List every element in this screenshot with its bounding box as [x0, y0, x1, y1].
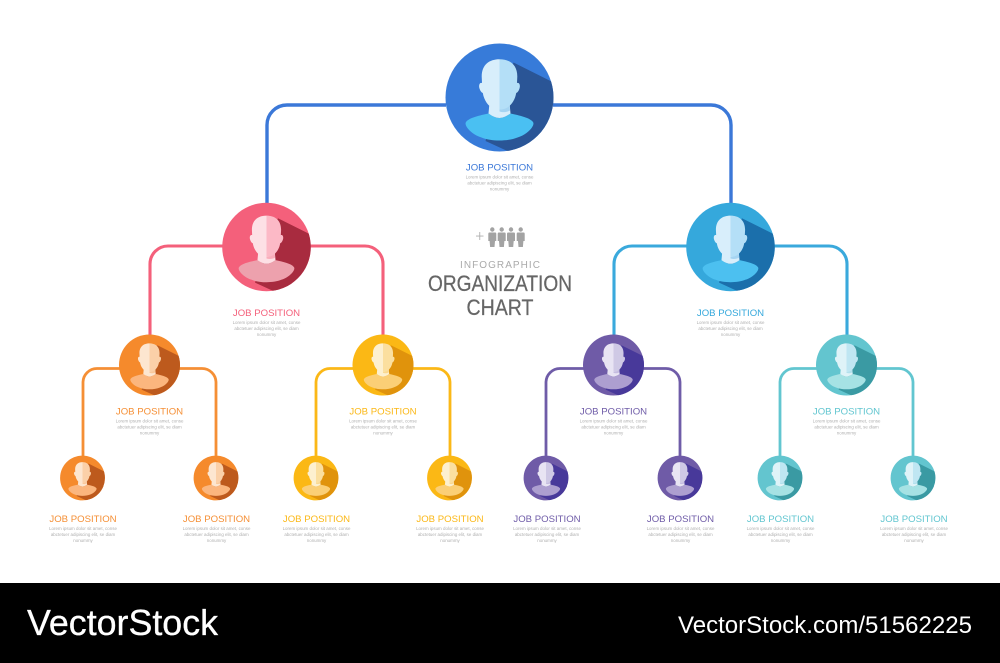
label: yellow leaf 1: JOB POSITION [283, 514, 350, 525]
label: pink: nonummy [257, 332, 277, 337]
footer bar: VectorStock.com/51562225 [678, 612, 972, 639]
label: purple: JOB POSITION [580, 406, 647, 418]
avatar: orange leaf 2 [194, 456, 242, 507]
label: yellow leaf 2: nonummy [440, 538, 461, 543]
label: orange leaf 2: nonummy [207, 538, 227, 543]
connector lines: orange branch [83, 368, 216, 457]
label: yellow leaf 1 [283, 514, 351, 543]
label: orange leaf 1: Lorem ipsum dolor sit amet, conse [49, 526, 117, 531]
avatar: orange leaf 1 [60, 456, 108, 507]
label: purple leaf 1 [513, 514, 581, 543]
label: teal leaf 2: Lorem ipsum dolor sit amet, conse [880, 526, 948, 531]
title: ORGANIZATION [428, 271, 572, 296]
label: orange leaf 2: abctetuer adipiscing elit, se diam [184, 532, 249, 537]
label: purple leaf 2: JOB POSITION [647, 514, 714, 525]
avatar: purple leaf 2 [658, 456, 706, 507]
label: teal leaf 2 [880, 514, 948, 543]
label: yellow leaf 2: JOB POSITION [416, 514, 484, 525]
label: orange: nonummy [140, 430, 160, 436]
label: teal leaf 2: JOB POSITION [880, 514, 948, 525]
label: yellow leaf 2 [416, 514, 484, 543]
label: orange leaf 1: JOB POSITION [49, 514, 117, 525]
avatar: teal leaf 2 [891, 456, 939, 507]
label: teal leaf 1: abctetuer adipiscing elit, se diam [748, 532, 813, 537]
footer bar: VectorStock [27, 602, 219, 643]
label: yellow leaf 1: Lorem ipsum dolor sit amet, conse [283, 526, 351, 531]
label: purple leaf 2: Lorem ipsum dolor sit amet, conse [647, 526, 715, 531]
label: orange [116, 406, 184, 436]
label: purple: nonummy [604, 430, 624, 436]
label: blue: JOB POSITION [697, 308, 764, 319]
label: teal: nonummy [837, 430, 857, 436]
label: purple leaf 2 [647, 514, 715, 543]
title [428, 271, 572, 320]
label: pink: Lorem ipsum dolor sit amet, conse [233, 320, 301, 325]
label: top position: JOB POSITION [466, 162, 533, 174]
connector lines: blue branch [614, 246, 847, 336]
label: purple leaf 1: JOB POSITION [513, 514, 581, 525]
connector lines: yellow branch [316, 368, 450, 457]
label: teal [813, 406, 881, 436]
avatar: purple leaf 1 [524, 456, 572, 507]
label: purple leaf 1: nonummy [537, 538, 558, 543]
label: orange leaf 2 [183, 514, 251, 543]
avatar: yellow leaf 1 [294, 456, 342, 507]
label: pink [233, 308, 301, 337]
label: yellow: Lorem ipsum dolor sit amet, conse [349, 418, 417, 424]
label: purple [580, 406, 648, 436]
connector lines: top level [267, 105, 731, 205]
label: orange: Lorem ipsum dolor sit amet, conse [116, 418, 184, 424]
footer bar [0, 583, 1000, 663]
subtitle: INFOGRAPHIC [460, 260, 540, 271]
title: CHART [466, 295, 534, 320]
label: teal: Lorem ipsum dolor sit amet, conse [813, 418, 881, 424]
label: teal leaf 1: JOB POSITION [747, 514, 814, 525]
avatar: yellow [352, 334, 418, 405]
label: yellow: abctetuer adipiscing elit, se diam [351, 424, 415, 430]
label: yellow leaf 2: abctetuer adipiscing elit, se diam [418, 532, 482, 537]
label: purple leaf 1: abctetuer adipiscing elit, se diam [515, 532, 579, 537]
label: orange leaf 2: Lorem ipsum dolor sit amet, conse [183, 526, 251, 531]
label: purple leaf 1: Lorem ipsum dolor sit amet, conse [513, 526, 581, 531]
avatar: purple [583, 334, 649, 405]
connector lines: pink branch [150, 246, 383, 336]
label: orange leaf 1 [49, 514, 117, 543]
label: yellow leaf 1: nonummy [307, 538, 327, 543]
label: orange leaf 1: nonummy [73, 538, 94, 543]
label: teal leaf 2: nonummy [904, 538, 925, 543]
label: orange: JOB POSITION [116, 406, 183, 418]
label: teal leaf 1 [747, 514, 815, 543]
label: blue: abctetuer adipiscing elit, se diam [698, 326, 763, 331]
label: orange leaf 2: JOB POSITION [183, 514, 250, 525]
label: yellow: nonummy [373, 430, 394, 436]
label: top position [466, 162, 534, 192]
label: purple: abctetuer adipiscing elit, se diam [581, 424, 646, 430]
avatar: blue [686, 203, 781, 304]
label: blue: Lorem ipsum dolor sit amet, conse [697, 320, 765, 325]
label: top position: abctetuer adipiscing elit, se diam [467, 180, 532, 186]
label: top position: nonummy [490, 186, 510, 192]
label: yellow leaf 2: Lorem ipsum dolor sit amet, conse [416, 526, 484, 531]
icon: plus and four people [476, 227, 525, 247]
label: blue: nonummy [721, 332, 741, 337]
label: pink: abctetuer adipiscing elit, se diam [234, 326, 299, 331]
label: pink: JOB POSITION [233, 308, 300, 319]
avatar: pink [222, 203, 317, 304]
avatar: teal [816, 334, 882, 405]
avatar: yellow leaf 2 [427, 456, 475, 507]
label: teal leaf 2: abctetuer adipiscing elit, se diam [882, 532, 946, 537]
avatar: teal leaf 1 [758, 456, 806, 507]
label: yellow: JOB POSITION [349, 406, 417, 418]
label: blue [697, 308, 765, 337]
label: yellow [349, 406, 417, 436]
avatar: orange [119, 334, 185, 405]
label: top position: Lorem ipsum dolor sit amet, conse [466, 174, 534, 180]
connector lines: purple branch [546, 368, 680, 457]
label: teal leaf 1: nonummy [771, 538, 791, 543]
connector lines: teal branch [780, 368, 913, 457]
label: orange leaf 1: abctetuer adipiscing elit, se diam [51, 532, 115, 537]
label: teal: JOB POSITION [813, 406, 880, 418]
label: orange: abctetuer adipiscing elit, se diam [117, 424, 182, 430]
label: teal: abctetuer adipiscing elit, se diam [814, 424, 879, 430]
label: purple: Lorem ipsum dolor sit amet, conse [580, 418, 648, 424]
label: yellow leaf 1: abctetuer adipiscing elit, se diam [284, 532, 349, 537]
label: teal leaf 1: Lorem ipsum dolor sit amet, conse [747, 526, 815, 531]
label: purple leaf 2: nonummy [671, 538, 691, 543]
avatar: top position [446, 44, 562, 168]
label: purple leaf 2: abctetuer adipiscing elit, se diam [648, 532, 713, 537]
